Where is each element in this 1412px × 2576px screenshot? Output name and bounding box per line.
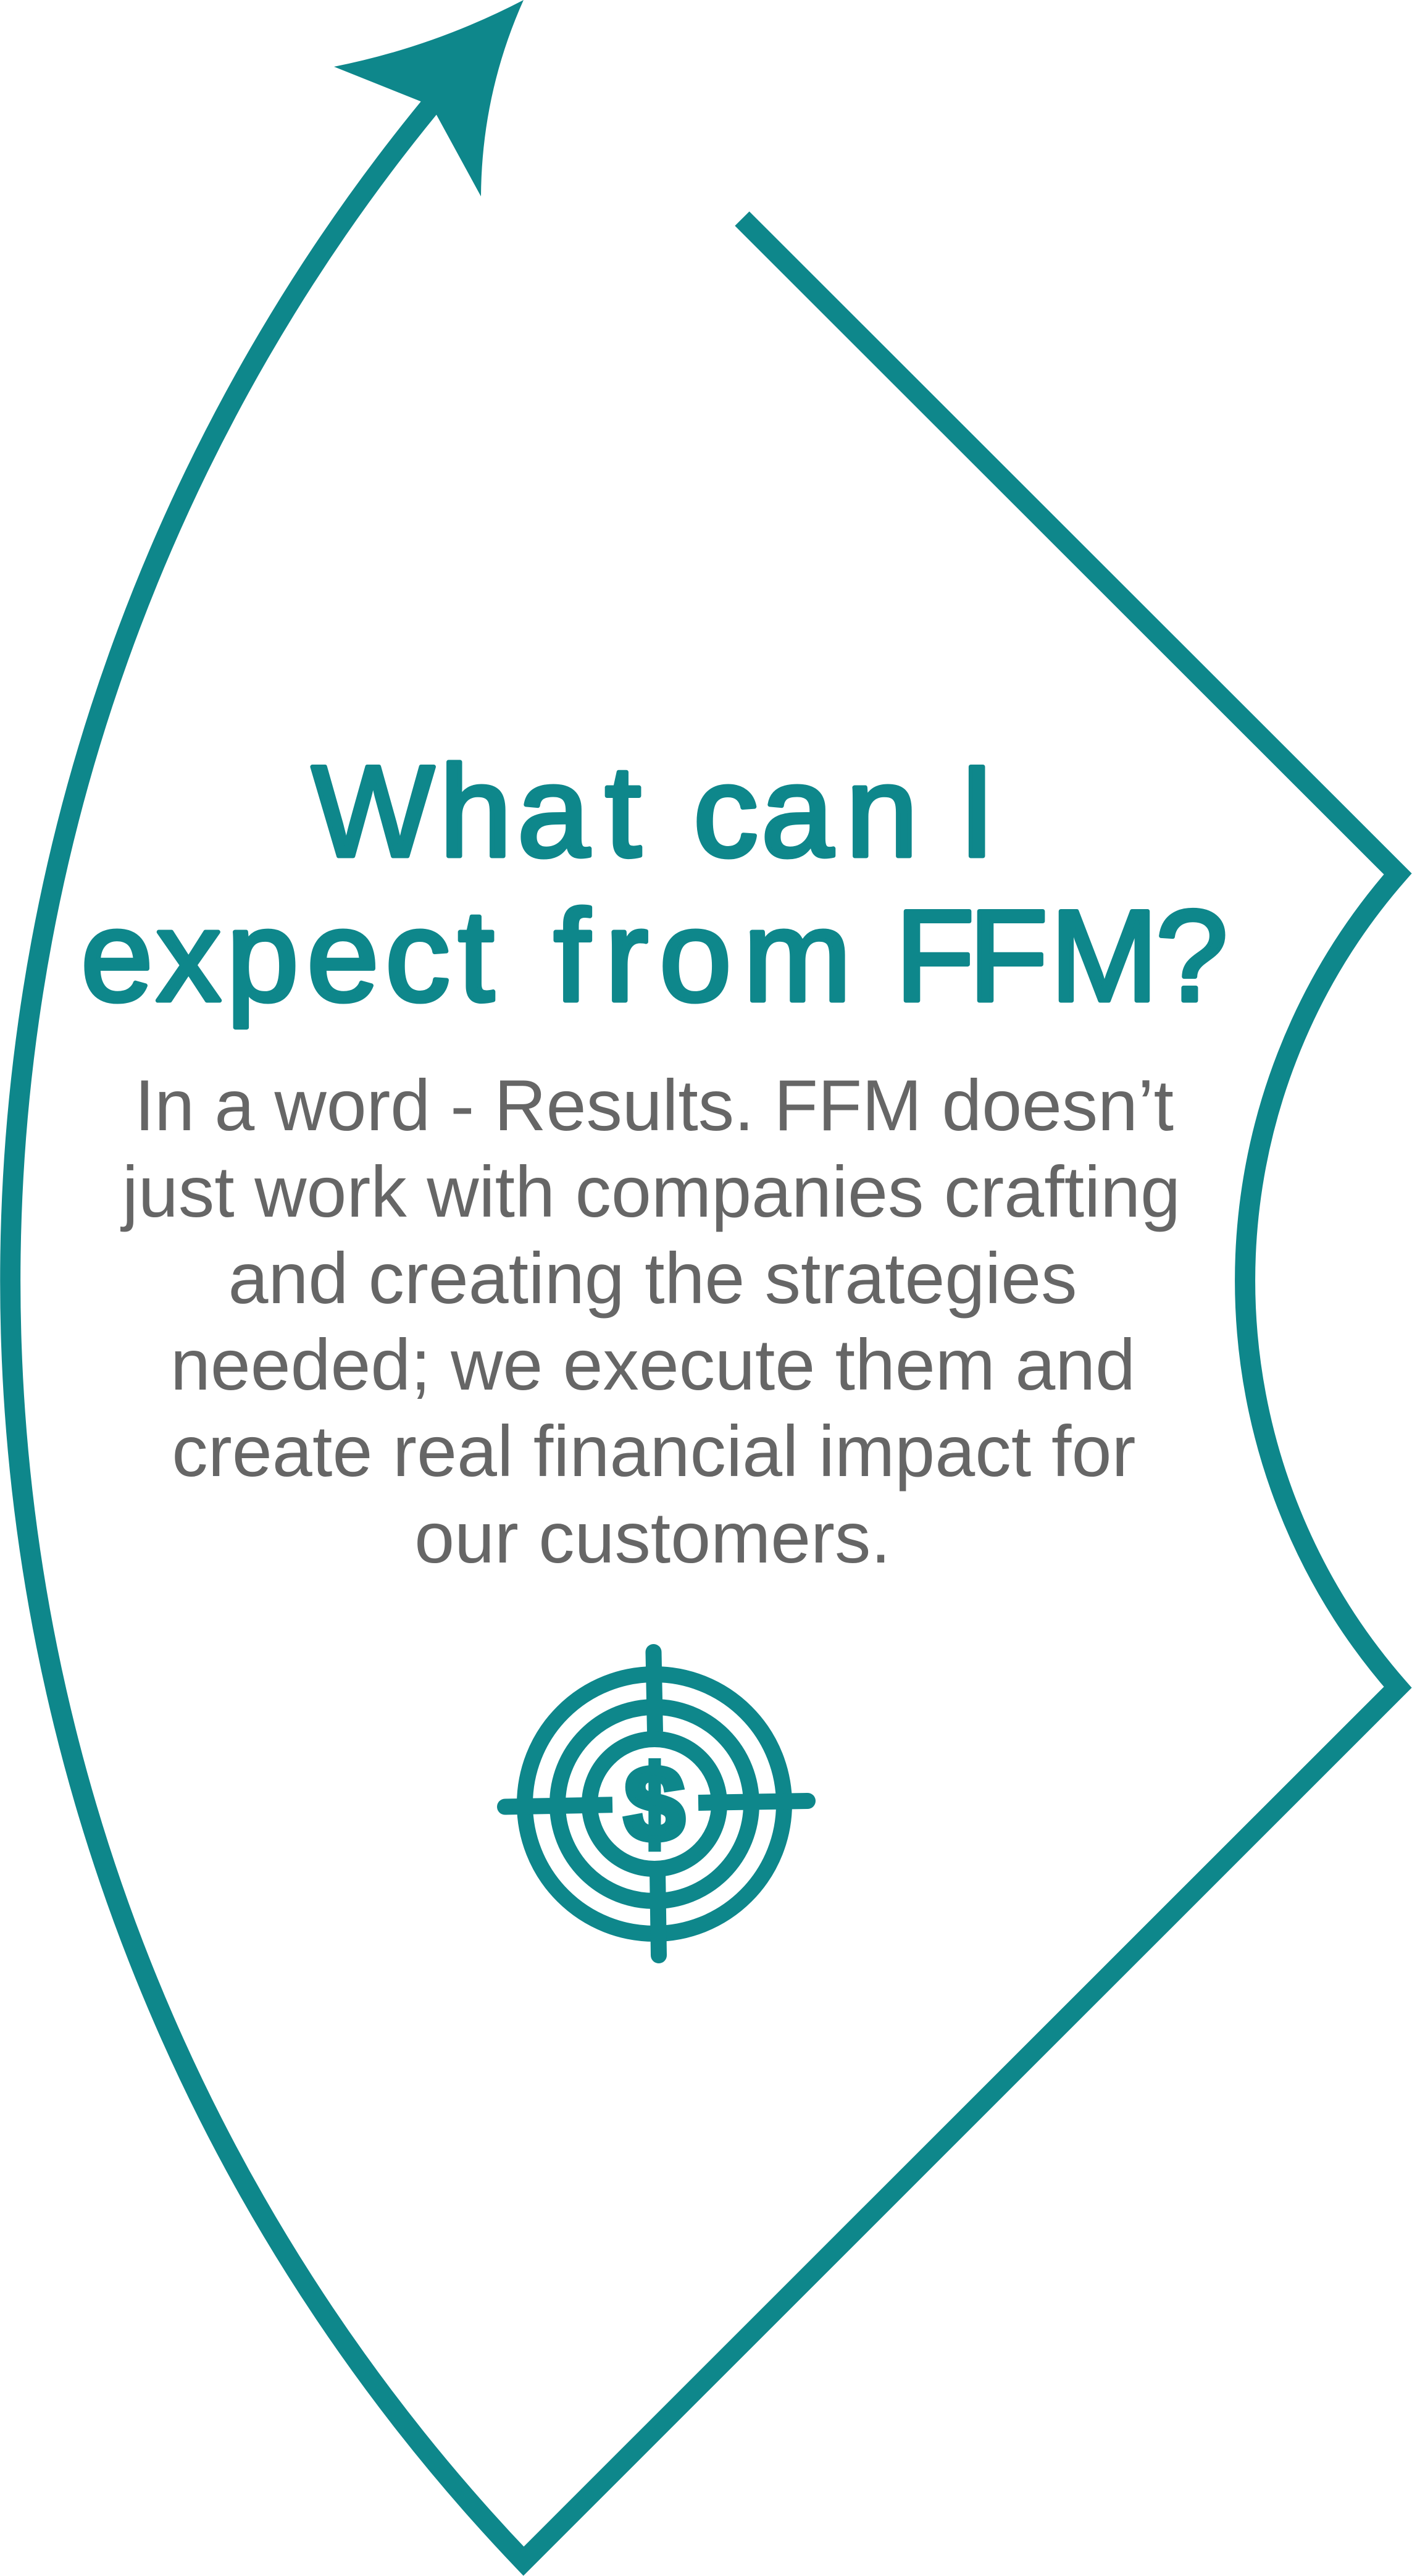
- body text: create real financial impact for: [172, 1411, 1136, 1491]
- heading: [81, 739, 1228, 1028]
- heading: I: [959, 739, 995, 884]
- icon: target with dollar sign: [497, 1644, 816, 1963]
- body text: In a word - Results. FFM doesn’t: [135, 1065, 1174, 1146]
- body text: needed; we execute them and: [170, 1324, 1135, 1405]
- icon: target with dollar sign: $: [625, 1745, 684, 1863]
- icon: arrowhead: [334, 0, 524, 196]
- body text: and creating the strategies: [228, 1238, 1077, 1319]
- heading: FFM?: [895, 883, 1228, 1028]
- heading: can: [693, 739, 918, 884]
- body text: our customers.: [414, 1497, 891, 1578]
- body text: just work with companies crafting: [120, 1151, 1180, 1232]
- heading: expect: [81, 883, 494, 1028]
- body text: [120, 1065, 1180, 1578]
- heading: from: [554, 883, 851, 1028]
- heading: What: [312, 739, 641, 884]
